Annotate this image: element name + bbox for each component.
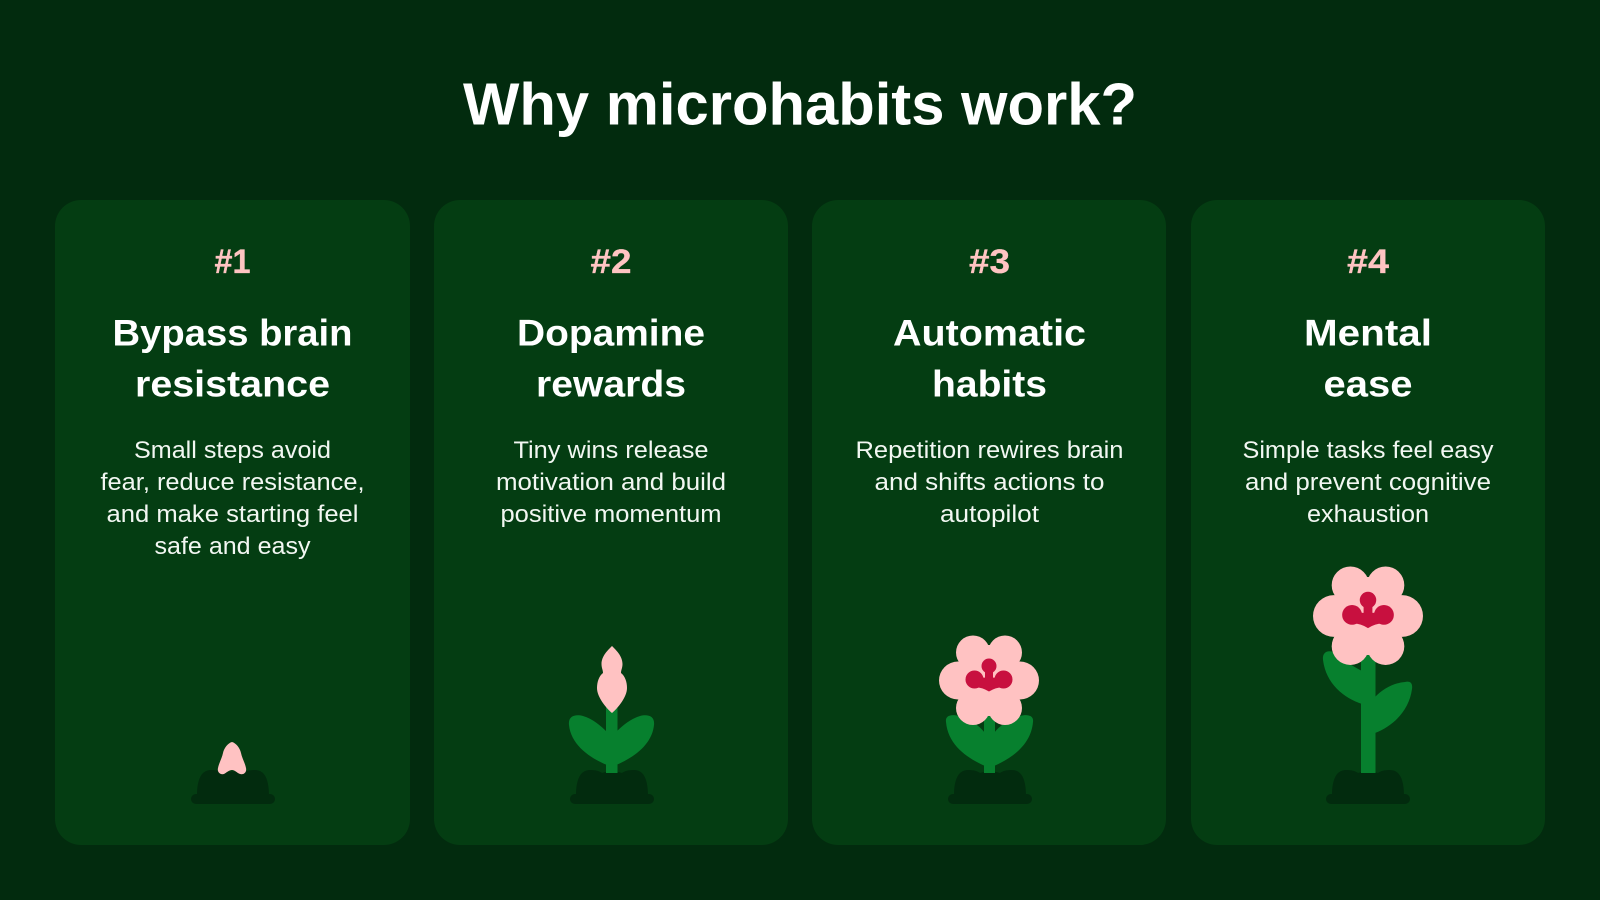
panel: card 4 mental ease xyxy=(1191,200,1545,845)
icon: tall flower xyxy=(1313,566,1423,804)
heading 2 xyxy=(517,312,705,404)
heading 1: Bypass brain xyxy=(112,312,352,354)
description 4: exhaustion xyxy=(1307,501,1429,528)
heading 3: habits xyxy=(932,364,1047,404)
panel: card 1 bypass brain resistance xyxy=(55,200,410,845)
description 4 xyxy=(1242,437,1494,528)
description 2: positive momentum xyxy=(500,501,722,528)
description 2: Tiny wins release xyxy=(514,437,708,464)
description 1: safe and easy xyxy=(154,533,310,560)
description 3 xyxy=(856,437,1124,528)
heading 1: resistance xyxy=(135,364,330,404)
heading 4: ease xyxy=(1324,364,1412,404)
number 3: #3 xyxy=(969,243,1010,281)
panel: card 3 automatic habits xyxy=(812,200,1166,845)
heading 3: Automatic xyxy=(893,312,1086,354)
description 2: motivation and build xyxy=(496,469,726,496)
icon: blooming flower xyxy=(939,636,1039,804)
description 3: and shifts actions to xyxy=(874,469,1104,496)
description 2 xyxy=(496,437,726,528)
heading 2: Dopamine xyxy=(517,312,705,354)
number 2: #2 xyxy=(590,243,632,281)
heading 4: Mental xyxy=(1304,312,1432,354)
description 1: fear, reduce resistance, xyxy=(100,469,364,496)
description 3: autopilot xyxy=(940,501,1039,528)
description 3: Repetition rewires brain xyxy=(856,437,1124,464)
panel: card 2 dopamine rewards xyxy=(434,200,788,845)
description 1 xyxy=(100,437,364,560)
heading 4 xyxy=(1304,312,1432,404)
number 1: #1 xyxy=(214,243,250,281)
number 4: #4 xyxy=(1347,243,1389,281)
description 1: and make starting feel xyxy=(106,501,358,528)
heading 2: rewards xyxy=(536,364,686,404)
heading 1 xyxy=(112,312,352,404)
icon: budding plant xyxy=(569,646,654,804)
description 1: Small steps avoid xyxy=(134,437,331,464)
icon: sprouting bud in soil xyxy=(191,742,275,804)
heading 3 xyxy=(893,312,1086,404)
title: Why microhabits work? xyxy=(463,72,1137,138)
description 4: Simple tasks feel easy xyxy=(1242,437,1494,464)
description 4: and prevent cognitive xyxy=(1245,469,1491,496)
